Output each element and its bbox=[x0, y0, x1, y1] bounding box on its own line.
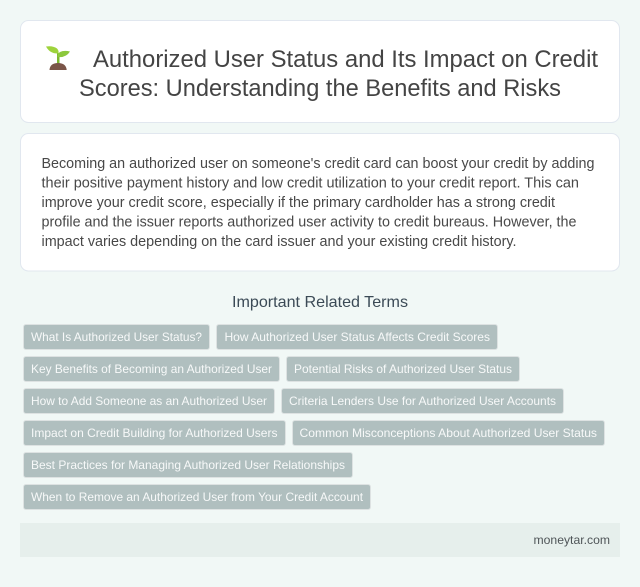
footer bar bbox=[20, 523, 620, 557]
title: Scores: Understanding the Benefits and Risks bbox=[79, 75, 561, 102]
related terms chips bbox=[24, 324, 604, 510]
chip: when to remove bbox=[24, 484, 370, 510]
chip: best practices: Best Practices for Managing Authorized User Relationships bbox=[31, 458, 345, 472]
summary text: improve your credit score, especially if the primary cardholder has a strong credit bbox=[42, 195, 555, 211]
summary text: impact varies depending on the card issuer and your existing credit history. bbox=[42, 234, 516, 250]
chip: potential risks: Potential Risks of Authorized User Status bbox=[294, 362, 512, 376]
panel: title card bbox=[20, 20, 620, 122]
summary text: Becoming an authorized user on someone's credit card can boost your credit by adding bbox=[42, 156, 594, 172]
footer site name: moneytar.com bbox=[534, 533, 610, 547]
chip: credit building: Impact on Credit Building for Authorized Users bbox=[31, 426, 278, 440]
chip: how to add: How to Add Someone as an Authorized User bbox=[31, 394, 267, 408]
summary text: profile and the issuer reports authorized user activity to credit bureaus. However, the bbox=[42, 214, 576, 230]
chip: misconceptions: Common Misconceptions About Authorized User Status bbox=[300, 426, 597, 440]
chip: misconceptions bbox=[292, 420, 604, 446]
chip: best practices bbox=[24, 452, 352, 478]
chip: what is authorized user status: What Is Authorized User Status? bbox=[31, 330, 202, 344]
summary text bbox=[42, 156, 594, 250]
chip: how status affects scores: How Authorized User Status Affects Credit Scores bbox=[224, 330, 490, 344]
chip: lender criteria: Criteria Lenders Use for Authorized User Accounts bbox=[289, 394, 556, 408]
panel: summary card bbox=[20, 134, 620, 271]
chip: potential risks bbox=[286, 356, 520, 382]
summary text: their positive payment history and low credit utilization to your credit report. This can bbox=[42, 176, 579, 192]
chip: lender criteria bbox=[282, 388, 564, 414]
title: Authorized User Status and Its Impact on Credit bbox=[93, 46, 598, 73]
title bbox=[79, 46, 598, 102]
chip: what is authorized user status bbox=[24, 324, 210, 350]
heading: related terms: Important Related Terms bbox=[232, 294, 408, 311]
chip: key benefits: Key Benefits of Becoming an Authorized User bbox=[31, 362, 272, 376]
icon: sprout bbox=[46, 46, 70, 70]
chip: how to add bbox=[24, 388, 274, 414]
chip: when to remove: When to Remove an Authorized User from Your Credit Account bbox=[31, 490, 364, 504]
chip: credit building bbox=[24, 420, 286, 446]
chip: how status affects scores bbox=[216, 324, 498, 350]
chip: key benefits bbox=[24, 356, 280, 382]
